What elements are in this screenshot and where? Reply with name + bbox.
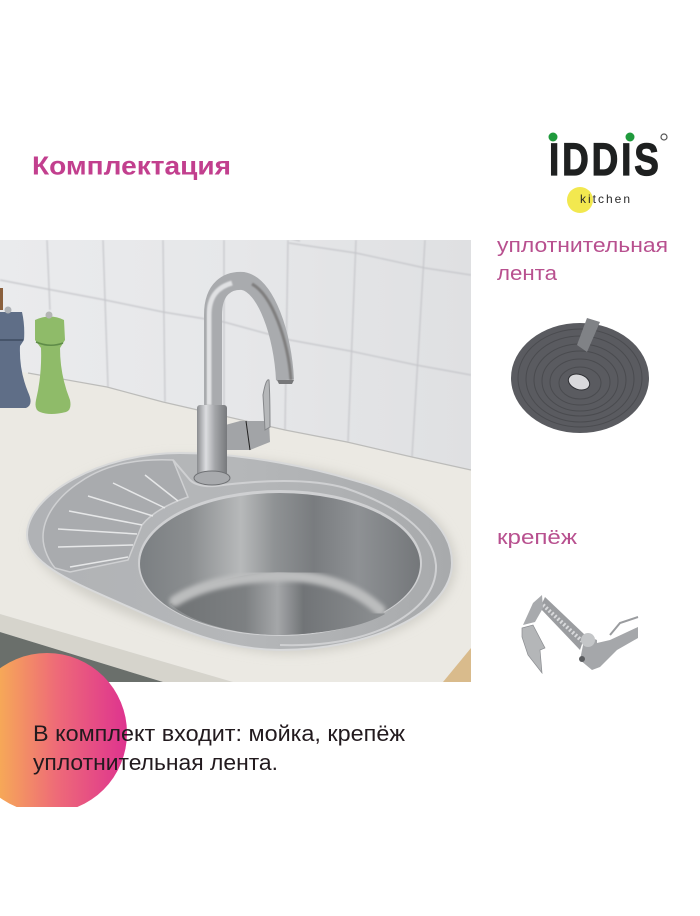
label: sealing tape: лента (497, 262, 558, 285)
product photo: sink with faucet (0, 238, 471, 682)
faucet (194, 281, 294, 485)
sink shadow (30, 456, 456, 654)
sink outer body (27, 453, 452, 650)
logo: IDDIS kitchen (548, 132, 667, 213)
description text (33, 721, 405, 775)
image: sealing tape roll (511, 318, 649, 433)
logo: IDDIS kitchen: IDDIS (549, 135, 659, 185)
drainboard recess (43, 460, 188, 572)
label: sealing tape: уплотнительная (497, 234, 668, 257)
bowl rim (173, 460, 436, 645)
gradient circle accent (0, 653, 127, 813)
label: fastener: крепёж (497, 526, 577, 549)
wall tile grout lines (0, 238, 471, 457)
label: sealing tape (497, 234, 668, 285)
infographic canvas (0, 132, 668, 807)
countertop (0, 368, 471, 682)
description text: В комплект входит: мойка, крепёж (33, 721, 405, 746)
drainboard ribs (58, 475, 178, 567)
pepper mill: green (35, 312, 70, 414)
pepper mill: blue (0, 306, 31, 408)
sink bowl (138, 490, 422, 636)
image: fastener clamp (522, 595, 638, 673)
counter front edge (0, 614, 233, 682)
description text: уплотнительная лента. (33, 750, 278, 775)
wooden corner (443, 648, 471, 682)
logo: IDDIS kitchen: kitchen (580, 192, 630, 206)
title: Комплектация (32, 150, 231, 180)
